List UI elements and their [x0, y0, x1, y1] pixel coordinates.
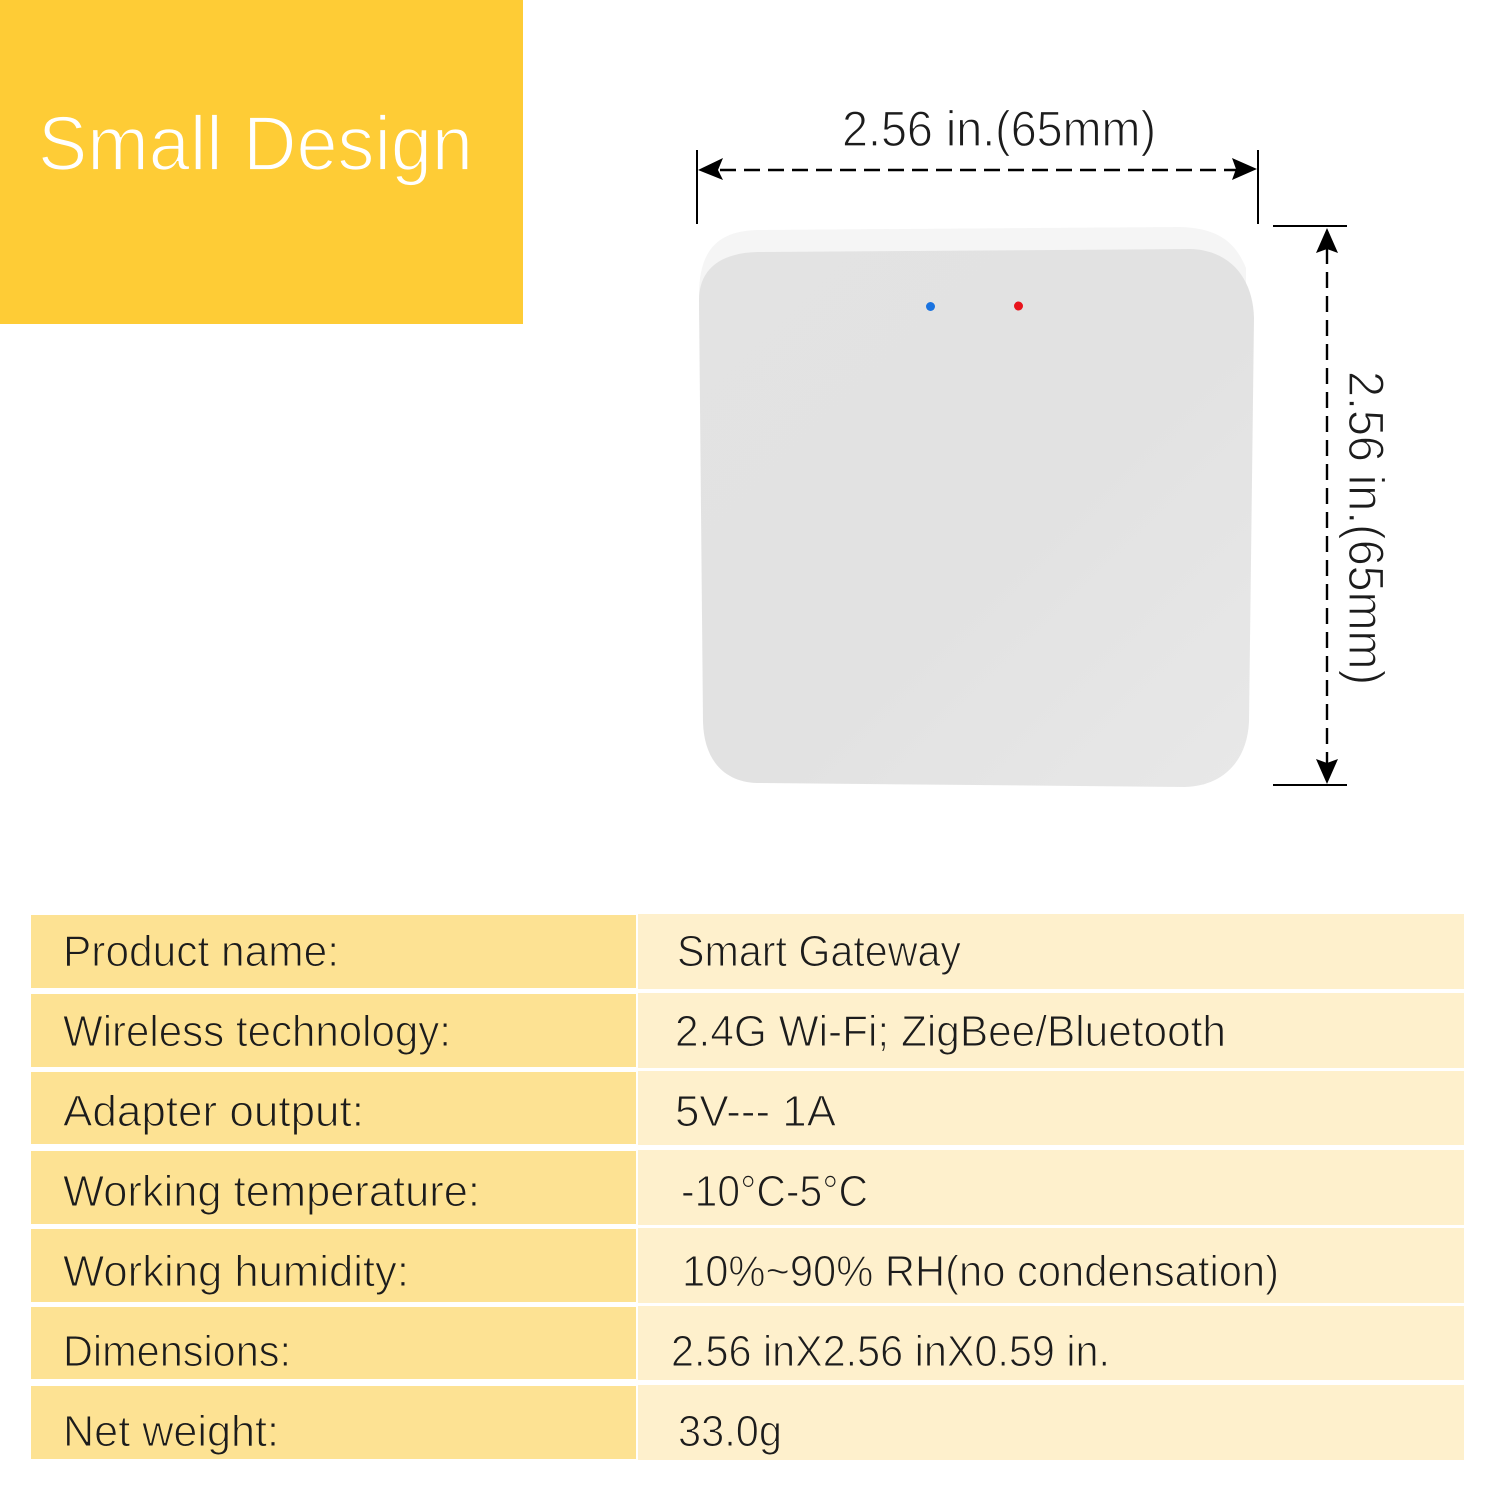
row: net weight: 33.0g	[678, 1407, 782, 1456]
height dimension label: 2.56 in.(65mm)	[1338, 371, 1394, 685]
row: product name: Smart Gateway	[677, 927, 961, 976]
row: wireless technology	[31, 993, 1464, 1068]
row: wireless technology: Wireless technology:	[63, 1007, 451, 1056]
row: dimensions: Dimensions:	[63, 1327, 291, 1376]
row: dimensions: 2.56 inX2.56 inX0.59 in.	[671, 1327, 1110, 1376]
row: adapter output: Adapter output:	[63, 1087, 364, 1136]
row: working humidity: Working humidity:	[63, 1247, 409, 1296]
arrow: width dimension	[697, 150, 1258, 224]
indicator: blue LED	[926, 302, 935, 311]
indicator: red LED	[1014, 302, 1023, 310]
row: working temperature: -10°C-5°C	[681, 1167, 868, 1216]
row: working humidity	[31, 1228, 1464, 1303]
row: product name: Product name:	[63, 927, 339, 976]
row: working temperature	[31, 1150, 1464, 1225]
row: working humidity: 10%~90% RH(no condensation)	[682, 1247, 1279, 1296]
row: wireless technology: 2.4G Wi-Fi; ZigBee/Bluetooth	[675, 1007, 1226, 1056]
row: net weight	[31, 1385, 1464, 1460]
arrow: height dimension	[1273, 226, 1347, 785]
width dimension label: 2.56 in.(65mm)	[842, 101, 1156, 157]
row: working temperature: Working temperature:	[63, 1167, 480, 1216]
row: adapter output: 5V--- 1A	[675, 1087, 837, 1136]
specification table	[31, 914, 1464, 1460]
row: adapter output	[31, 1071, 1464, 1145]
product: smart gateway device	[699, 227, 1254, 787]
title banner: Small Design	[38, 101, 473, 187]
row: net weight: Net weight:	[63, 1407, 279, 1456]
row: dimensions	[31, 1306, 1464, 1380]
row: product name	[31, 914, 1464, 989]
title banner	[0, 0, 523, 324]
